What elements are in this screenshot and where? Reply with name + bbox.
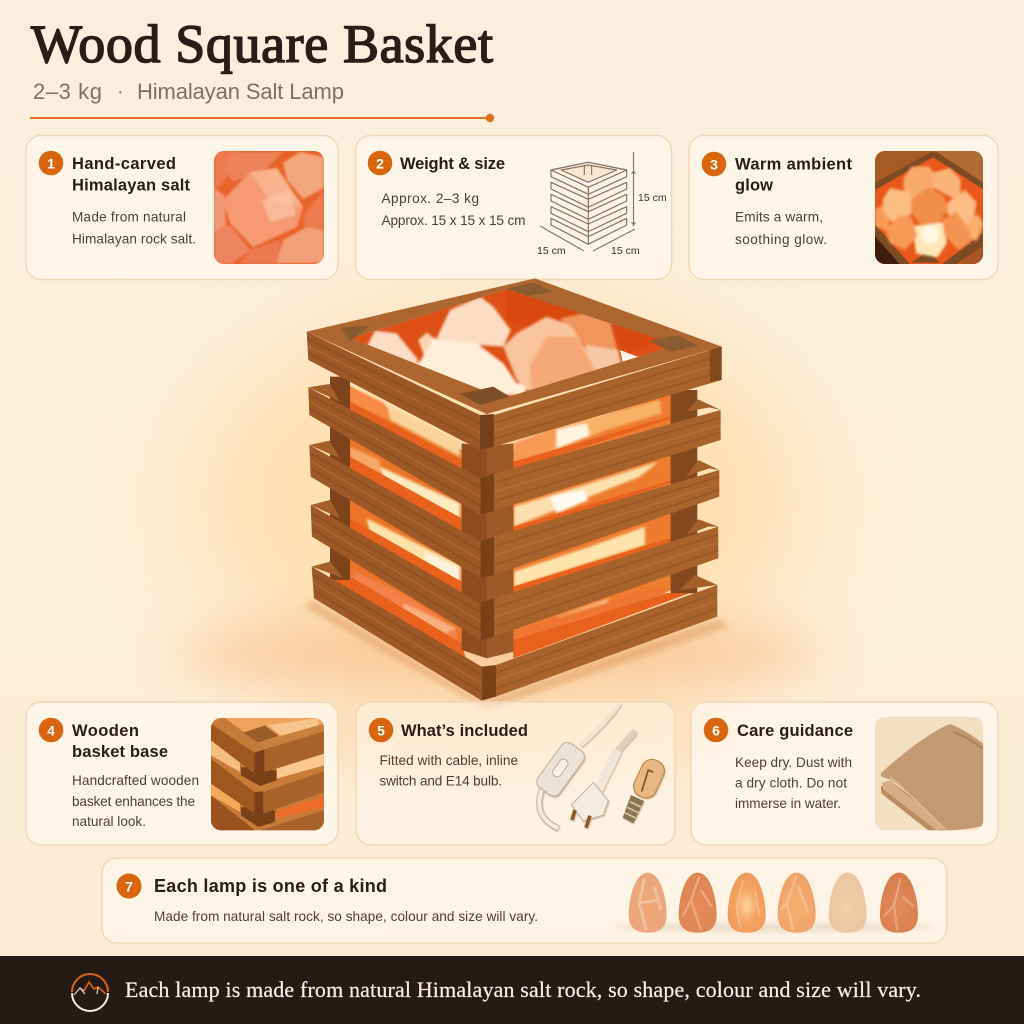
text 4 xyxy=(72,773,199,829)
badge 7 xyxy=(116,874,142,898)
subtitle: · xyxy=(117,81,124,103)
lamp e xyxy=(829,873,867,933)
text 6: immerse in water. xyxy=(735,796,841,811)
lamp b xyxy=(679,873,717,933)
text 1: Himalayan rock salt. xyxy=(72,232,196,246)
icon: mountain logo xyxy=(72,974,108,1011)
lit inner rail faces xyxy=(330,401,698,662)
heading 3 xyxy=(735,156,852,194)
lamp a xyxy=(629,873,667,933)
rail 3 xyxy=(309,441,719,578)
text 5: Fitted with cable, inline xyxy=(380,753,518,768)
text 3: soothing glow. xyxy=(735,232,827,247)
text 7: Made from natural salt rock, so shape, colour and size will vary. xyxy=(154,909,538,924)
product: wooden basket lamp xyxy=(303,278,730,710)
image: cable, switch, plug and bulb xyxy=(534,703,668,828)
badge 1: 1 xyxy=(47,156,55,172)
text 5: switch and E14 bulb. xyxy=(380,774,502,788)
image: basket corner xyxy=(211,718,324,830)
text 6: a dry cloth. Do not xyxy=(735,776,847,790)
text 5 xyxy=(380,753,518,788)
panel 2: weight and size xyxy=(356,136,672,280)
heading 1: Himalayan salt xyxy=(72,176,190,194)
subtitle xyxy=(33,79,344,104)
salt lamp row xyxy=(613,873,933,933)
lamp d xyxy=(778,873,816,933)
salt inside rim xyxy=(352,289,677,398)
badge 1 xyxy=(39,151,63,175)
diagram: basket with dimensions xyxy=(537,152,667,257)
heading 4 xyxy=(72,722,168,761)
interior glow xyxy=(333,377,672,660)
subtitle: 2–3 kg xyxy=(33,79,102,104)
panel 7: one of a kind xyxy=(102,858,947,943)
badge 4: 4 xyxy=(47,722,55,738)
rail 2 xyxy=(308,384,721,515)
title: Wood Square Basket xyxy=(31,14,493,74)
text 4: Handcrafted wooden xyxy=(72,773,199,788)
badge 4 xyxy=(39,718,63,742)
image: glowing salt xyxy=(875,151,983,264)
heading 3: Warm ambient xyxy=(735,156,852,174)
image: folded cloth xyxy=(875,717,983,830)
diagram: basket with dimensions: 15 cm xyxy=(611,245,640,257)
text 2 xyxy=(382,191,526,228)
heading 5: What’s included xyxy=(401,722,528,740)
heading 4: basket base xyxy=(72,743,168,761)
rail bottom xyxy=(312,562,717,701)
heading 6: Care guidance xyxy=(737,722,853,740)
text 1: Made from natural xyxy=(72,210,186,224)
badge 2 xyxy=(368,151,392,175)
text 4: natural look. xyxy=(72,814,146,829)
badge 3: 3 xyxy=(710,156,718,172)
text 2: Approx. 2–3 kg xyxy=(382,191,479,206)
panel 1: hand-carved salt xyxy=(26,136,338,280)
text 3 xyxy=(735,210,827,247)
panel 5: what's included xyxy=(356,702,675,845)
footer band xyxy=(0,956,1024,1024)
footer message: Each lamp is made from natural Himalayan salt rock, so shape, colour and size will vary. xyxy=(125,977,921,1002)
text 6: Keep dry. Dust with xyxy=(735,755,852,770)
panel 3: warm glow xyxy=(689,136,998,280)
heading 2: Weight & size xyxy=(400,155,505,173)
subtitle: Himalayan Salt Lamp xyxy=(137,79,344,104)
title rule with dot xyxy=(30,114,494,122)
badge 7: 7 xyxy=(125,878,133,894)
diagram: basket with dimensions: 15 cm xyxy=(638,192,667,204)
lamp c xyxy=(728,873,766,933)
rail 4 xyxy=(311,500,718,640)
panel 4: wooden basket base xyxy=(26,702,338,845)
heading 4: Wooden xyxy=(72,722,139,740)
badge 5: 5 xyxy=(377,722,385,738)
image: salt crystals xyxy=(214,151,324,264)
text 3: Emits a warm, xyxy=(735,210,823,224)
heading 1: Hand-carved xyxy=(72,155,176,173)
floor contact shadow xyxy=(303,600,730,710)
badge 6 xyxy=(704,718,728,742)
text 4: basket enhances the xyxy=(72,794,195,809)
text 6 xyxy=(735,755,852,811)
lamp f xyxy=(880,873,918,933)
heading 3: glow xyxy=(735,176,773,194)
text 1 xyxy=(72,210,196,246)
badge 2: 2 xyxy=(376,156,384,172)
heading 1 xyxy=(72,155,190,194)
wooden posts xyxy=(330,377,697,658)
text 2: Approx. 15 x 15 x 15 cm xyxy=(382,213,526,228)
diagram: basket with dimensions: 15 cm xyxy=(537,245,566,257)
panel 6: care guidance xyxy=(691,702,998,845)
badge 6: 6 xyxy=(712,722,720,738)
badge 3 xyxy=(702,152,726,176)
rail 1 rim xyxy=(307,278,722,450)
heading 7: Each lamp is one of a kind xyxy=(154,876,387,896)
badge 5 xyxy=(369,718,393,742)
